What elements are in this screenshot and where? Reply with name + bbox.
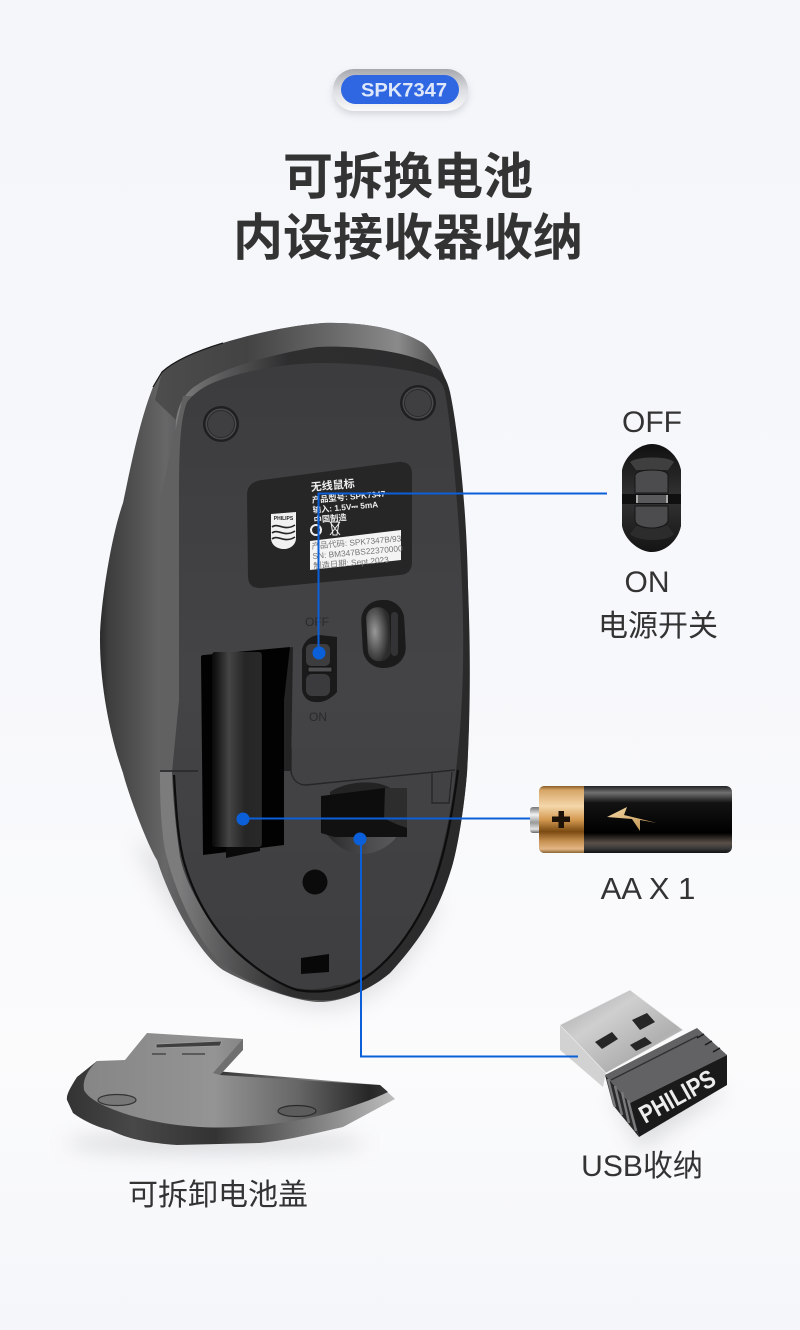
title — [233, 149, 583, 266]
switch caption: 电源开关 — [598, 610, 718, 643]
callout line: power switch — [312, 494, 607, 660]
label specifications: 输入: 1.5V⎓ 5mA — [312, 499, 379, 515]
power switch — [302, 635, 337, 702]
cover caption: 可拆卸电池盖 — [128, 1179, 308, 1212]
label specifications: 无线鼠标 — [310, 476, 355, 494]
white serial sticker: 制造日期: Sept 2023 — [313, 554, 390, 571]
label specifications: 中国制造 — [313, 512, 348, 525]
bottom slot — [301, 954, 329, 974]
cover tab side — [213, 1039, 243, 1075]
lightning bolt — [607, 807, 657, 831]
top cap — [155, 323, 448, 420]
USB caption: USB收纳 — [581, 1150, 703, 1183]
cover tab slot — [156, 1041, 222, 1048]
latch notch — [432, 772, 452, 803]
plate outline — [174, 770, 458, 992]
white serial sticker: SN: BM347BS22370000 — [312, 543, 403, 561]
mouse underside — [100, 323, 470, 1010]
philips shield logo: PHILIPS — [274, 516, 294, 522]
base plate — [172, 363, 463, 989]
callout line: battery — [236, 812, 530, 826]
top-left edge highlight — [153, 343, 223, 387]
rubber foot left — [203, 406, 239, 442]
detachable battery cover — [65, 1033, 395, 1153]
title: 可拆换电池 — [283, 149, 533, 205]
icon: power switch close-up — [622, 444, 681, 552]
plus sign — [552, 811, 570, 828]
title: 内设接收器收纳 — [233, 210, 583, 266]
optical sensor — [360, 599, 407, 669]
philips shield logo — [271, 512, 296, 549]
switch label OFF: OFF — [622, 406, 682, 439]
receiver housing — [605, 1028, 727, 1137]
label specifications: 产品型号: SPK7347 — [311, 489, 386, 505]
model badge: SPK7347 — [361, 80, 447, 102]
shell rim — [160, 347, 470, 1000]
icon: USB receiver — [560, 990, 730, 1150]
screw hole — [302, 870, 328, 894]
label specifications — [310, 474, 388, 525]
brand text: PHILIPS — [634, 1065, 721, 1129]
cover top face — [84, 1033, 388, 1127]
battery compartment — [201, 647, 293, 858]
cover foot right — [278, 1106, 316, 1116]
side strip — [160, 396, 200, 772]
callout line: USB storage — [354, 832, 578, 1056]
seam lines — [160, 748, 455, 785]
product label — [247, 462, 412, 588]
white serial sticker — [310, 530, 404, 571]
cover foot left — [98, 1094, 136, 1106]
embossed ON: ON — [309, 710, 327, 724]
compliance icons — [311, 522, 340, 535]
switch label ON: ON — [624, 566, 670, 599]
icon: AA battery — [530, 786, 732, 853]
cover rim — [67, 1061, 395, 1145]
receiver slot — [321, 782, 407, 854]
white serial sticker: 产品代码: SPK7347B/93 — [311, 533, 402, 551]
model badge — [333, 69, 468, 114]
USB metal plug — [560, 990, 683, 1087]
rubber foot right — [400, 385, 436, 421]
battery caption: AA X 1 — [601, 871, 695, 906]
embossed OFF: OFF — [305, 615, 329, 629]
mouse outer shell — [100, 323, 469, 1002]
